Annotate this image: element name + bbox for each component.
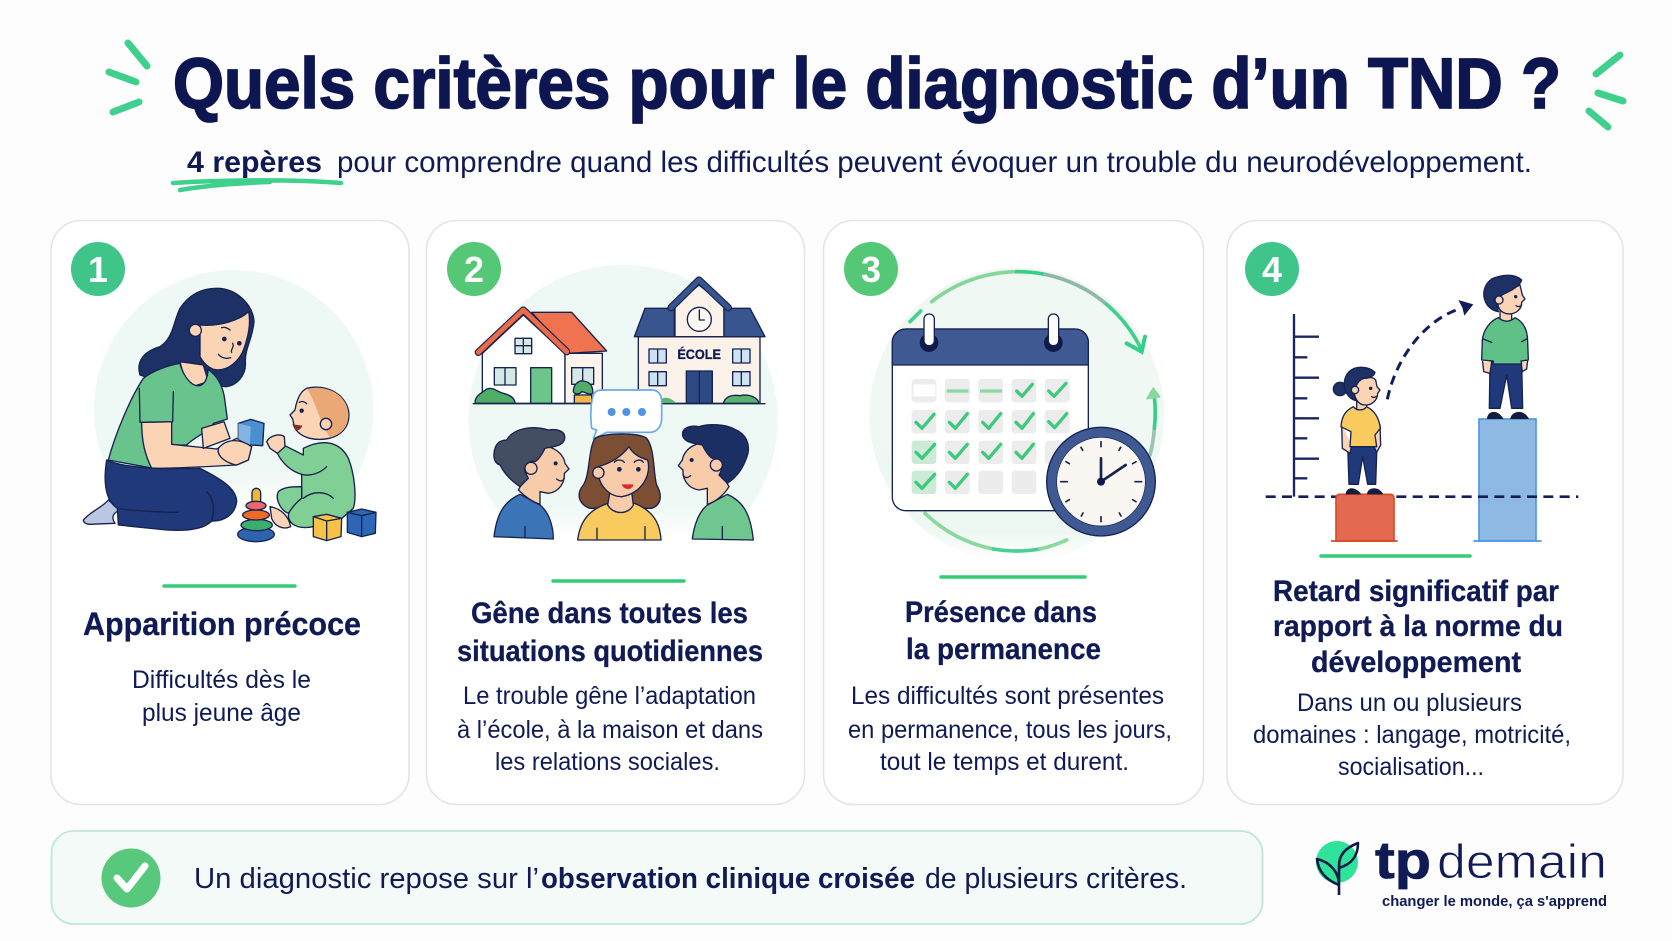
description: domaines : langage, motricité,: [1253, 721, 1571, 749]
heading: Gêne dans toutes les: [471, 597, 748, 630]
description: socialisation...: [1338, 753, 1484, 781]
heading: la permanence: [906, 633, 1101, 666]
number badge 2: [447, 242, 501, 296]
number badge 1: 1: [88, 249, 108, 290]
heading: [1273, 575, 1563, 679]
logo: tpdemain: demain: [1437, 836, 1607, 889]
description: plus jeune âge: [142, 699, 301, 727]
icon: leaf sprout: [1316, 841, 1358, 895]
heading: [905, 596, 1101, 666]
number badge 3: 3: [861, 249, 881, 290]
number badge 4: 4: [1262, 249, 1282, 290]
subtitle: 4 repères: [187, 146, 322, 179]
illustration: calendar, clock and cycle arrows: [869, 268, 1164, 562]
description: Dans un ou plusieurs: [1297, 689, 1522, 717]
baby head: [290, 387, 349, 439]
number badge 1: [71, 242, 125, 296]
callout text: [194, 863, 1187, 895]
description: [457, 682, 763, 776]
divider: [164, 584, 295, 588]
subtitle underline stroke: [173, 180, 341, 190]
heading: Présence dans: [905, 596, 1097, 629]
description: [848, 682, 1172, 776]
panel: card 1: [51, 220, 409, 804]
panel: card 3: [824, 220, 1204, 804]
divider: [941, 575, 1085, 579]
illustration: children compared to height norm: [1266, 275, 1578, 541]
tall child: [1482, 275, 1529, 419]
heading: développement: [1311, 646, 1521, 679]
illustration: home, school and friends: [468, 265, 778, 574]
title: Quels critères pour le diagnostic d’un TND ?: [173, 45, 1561, 124]
illustration: mother and baby playing: [83, 270, 376, 549]
panel: card 2: [426, 220, 804, 804]
subtitle: pour comprendre quand les difficultés peuvent évoquer un trouble du neurodéveloppement.: [337, 146, 1532, 179]
description: les relations sociales.: [495, 748, 720, 776]
callout text: observation clinique croisée: [541, 863, 915, 895]
callout text: Un diagnostic repose sur l’: [194, 863, 539, 895]
description: en permanence, tous les jours,: [848, 716, 1172, 744]
icon: check mark: [102, 848, 160, 908]
divider: [1321, 554, 1470, 558]
small child: [1333, 367, 1383, 494]
number badge 2: 2: [464, 249, 484, 290]
heading: Apparition précoce: [83, 606, 361, 642]
description: tout le temps et durent.: [880, 748, 1129, 776]
number badge 3: [844, 242, 898, 296]
school sign: ÉCOLE: [677, 346, 721, 362]
heading: situations quotidiennes: [457, 635, 763, 668]
heading: [457, 597, 763, 668]
logo: tpdemain: tp: [1375, 832, 1431, 890]
number badge 4: [1245, 242, 1299, 296]
logo: tpdemain: changer le monde, ça s'apprend: [1382, 893, 1607, 910]
logo: tpdemain: [1316, 832, 1607, 910]
description: Le trouble gêne l’adaptation: [463, 682, 756, 710]
heading: rapport à la norme du: [1273, 610, 1563, 643]
divider: [553, 579, 684, 583]
description: Les difficultés sont présentes: [851, 682, 1164, 710]
heading: Retard significatif par: [1273, 575, 1559, 608]
description: [132, 666, 311, 727]
callout text: de plusieurs critères.: [925, 863, 1187, 895]
panel: card 4: [1227, 220, 1623, 804]
callout banner: [52, 831, 1262, 924]
description: Difficultés dès le: [132, 666, 311, 694]
decorative sparks left of title: [109, 43, 147, 112]
description: à l’école, à la maison et dans: [457, 716, 763, 744]
decorative sparks right of title: [1589, 55, 1623, 127]
description: [1253, 689, 1571, 781]
